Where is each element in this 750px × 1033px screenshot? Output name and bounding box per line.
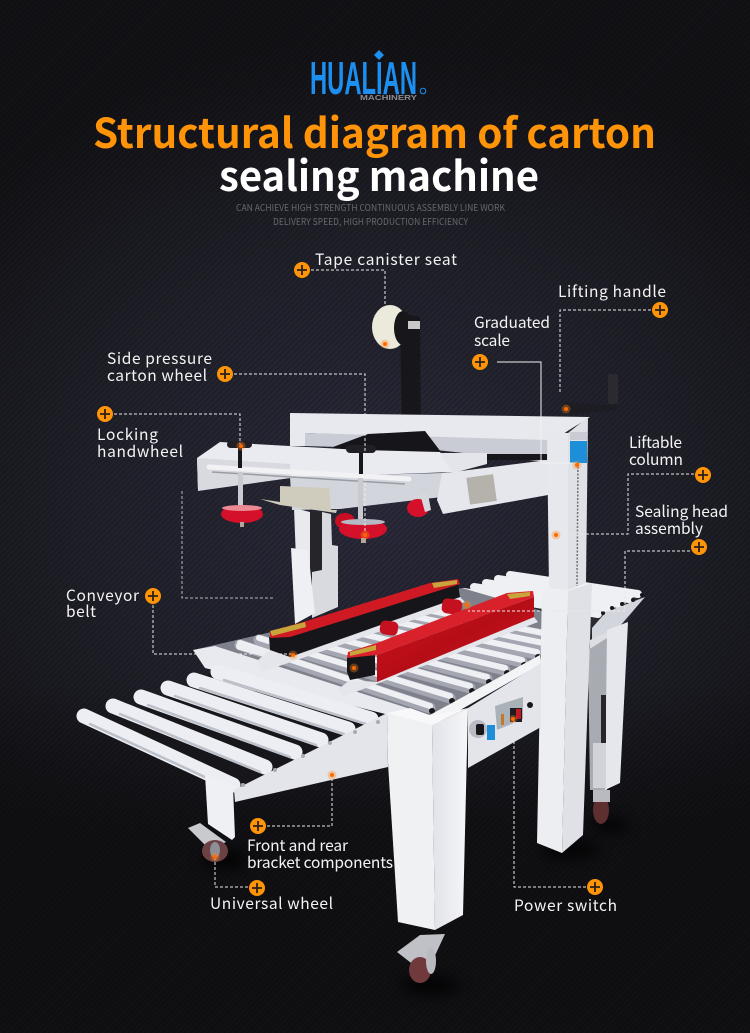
lower column: [537, 583, 592, 853]
subtitle: DELIVERY SPEED, HIGH PRODUCTION EFFICIENCY: [273, 214, 469, 228]
rear leg and caster: [588, 622, 628, 824]
callout: conveyor belt: belt: [66, 600, 96, 622]
callout: front and rear bracket components: [247, 770, 393, 873]
subtitle: CAN ACHIEVE HIGH STRENGTH CONTINUOUS ASSEMBLY LINE WORK: [236, 200, 506, 214]
front sealing belt: [347, 591, 534, 682]
callout: lifting handle: [558, 280, 668, 414]
callout: side pressure carton wheel: [107, 347, 370, 540]
control panel with switch: [469, 697, 533, 740]
callout: graduated scale: [472, 311, 582, 470]
callout: power switch: [509, 715, 617, 916]
main conveyor bed: [193, 588, 548, 726]
callout: lifting handle: Lifting handle: [558, 280, 666, 302]
callout: liftable column: column: [629, 448, 683, 470]
callout: side pressure carton wheel: carton wheel: [107, 364, 207, 386]
callout: universal wheel: [210, 852, 333, 914]
callout: sealing head assembly: Sealing head: [635, 500, 728, 522]
callout: conveyor belt: Conveyor: [66, 584, 140, 606]
side pressure rollers on bed: [379, 598, 463, 636]
red pressure wheels and locking handwheels: [221, 441, 431, 543]
logo: Hualian Machinery: MACHINERY: [360, 95, 417, 102]
rear roller section: [462, 574, 645, 660]
front right leg and caster: [387, 708, 468, 983]
tape canister seat: [372, 305, 421, 436]
top crossbeam: [290, 413, 590, 462]
callout: liftable column: [552, 431, 711, 540]
logo: Hualian Machinery: [310, 50, 426, 104]
title: Structural diagram of carton: [93, 100, 656, 160]
faint leader line: [182, 491, 273, 598]
callout: side pressure carton wheel: Side pressure: [107, 347, 212, 369]
callout: locking handwheel: Locking: [97, 423, 158, 445]
callout: locking handwheel: handwheel: [97, 440, 183, 462]
logo: Hualian Machinery: HUALIAN: [310, 52, 417, 104]
callout: graduated scale: Graduated: [474, 311, 550, 333]
title: sealing machine: [219, 143, 539, 203]
title: [93, 100, 656, 203]
callout: tape canister seat: [294, 248, 457, 348]
callout: locking handwheel: [97, 406, 246, 462]
side rail: [468, 663, 541, 768]
callout: front and rear bracket components: Front and rear: [247, 834, 349, 856]
callout: conveyor belt: [66, 584, 358, 672]
subtitle: [236, 200, 506, 228]
rear sealing belt: [269, 579, 460, 657]
callout: power switch: Power switch: [514, 894, 617, 916]
carton sealing machine: [84, 305, 645, 994]
left support post: [291, 508, 338, 624]
callout: sealing head assembly: [462, 500, 728, 611]
floor shadows: [201, 818, 628, 994]
front left leg and caster: [188, 713, 388, 862]
callout: front and rear bracket components: bracket components: [247, 851, 393, 873]
belt base plates: [258, 597, 538, 696]
callout: tape canister seat: Tape canister seat: [315, 248, 457, 270]
callout: universal wheel: Universal wheel: [210, 892, 333, 914]
callout: liftable column: Liftable: [629, 431, 682, 453]
callout: graduated scale: scale: [474, 329, 510, 351]
lifting handle: [561, 374, 618, 414]
sealing head frame: [197, 442, 548, 514]
lifting column upper: [547, 417, 588, 590]
callout: sealing head assembly: assembly: [635, 517, 703, 539]
front roller section: [84, 672, 385, 790]
